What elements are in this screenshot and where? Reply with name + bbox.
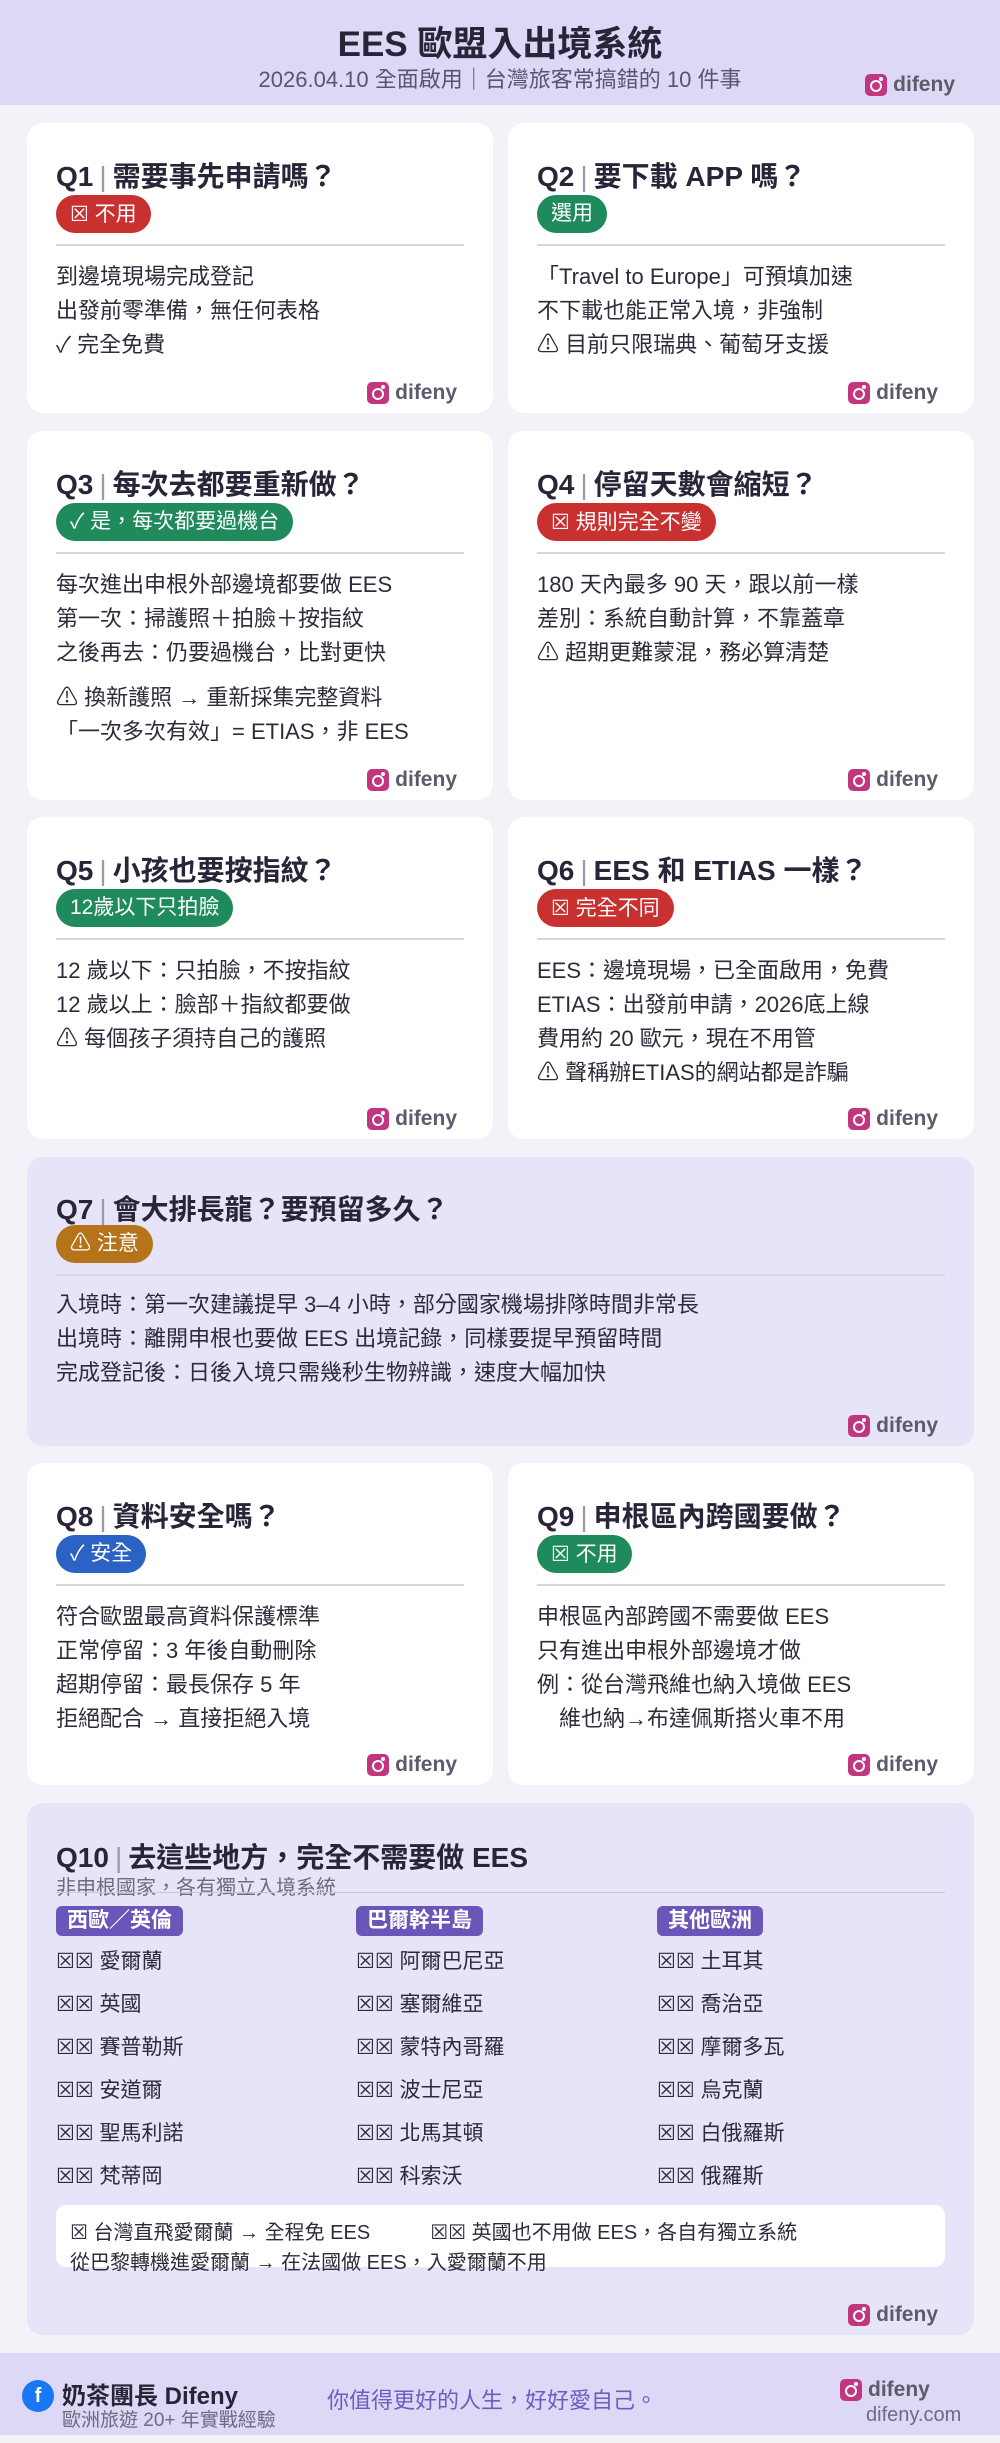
body text: 維也納→布達佩斯搭火車不用 [559,1706,845,1731]
body text: 符合歐盟最高資料保護標準 [56,1604,320,1629]
badge: ☒ 規則完全不變 [551,510,702,534]
panel: Q6 [508,817,974,1139]
logo [848,1107,938,1130]
body text: 申根區內部跨國不需要做 EES [537,1604,829,1629]
logo: difeny [876,768,938,791]
body text: 出發前零準備，無任何表格 [56,298,320,323]
list: balkan: ☒☒ 塞爾維亞 [356,1992,484,2016]
body text: 入境時：第一次建議提早 3–4 小時，部分國家機場排隊時間非常長 [56,1292,699,1317]
heading Q10: Q10|去這些地方，完全不需要做 EES [56,1842,528,1873]
logo [367,1107,457,1130]
tag: other: 其他歐洲 [668,1909,752,1932]
badge [56,889,233,927]
body text [56,958,351,1051]
logo: difeny [395,1107,457,1130]
body text: 「一次多次有效」= ETIAS，非 EES [56,719,409,744]
badge: ⚠ 注意 [70,1232,139,1255]
body text [56,1604,320,1731]
logo: difeny [876,381,938,404]
body text: ⚠ 超期更難蒙混，務必算清楚 [537,640,829,665]
logo: difeny [395,1753,457,1776]
logo [848,381,938,404]
logo: difeny [876,1414,938,1437]
heading Q6: Q6|EES 和 ETIAS 一樣？ [537,855,867,886]
note box: ☒ 台灣直飛愛爾蘭 → 全程免 EES ☒☒ 英國也不用做 EES，各自有獨立系統 [70,2220,797,2244]
body text: 完成登記後：日後入境只需幾秒生物辨識，速度大幅加快 [56,1360,606,1385]
note box: 從巴黎轉機進愛爾蘭 → 在法國做 EES，入愛爾蘭不用 [70,2252,547,2274]
list: balkan: ☒☒ 北馬其頓 [356,2121,484,2145]
list: west: ☒☒ 聖馬利諾 [56,2121,184,2145]
logo [367,768,457,791]
logo: difeny [876,2303,938,2326]
heading Q2: Q2|要下載 APP 嗎？ [537,161,806,192]
body text: 每次進出申根外部邊境都要做 EES [56,572,392,597]
icon: facebook [22,2380,54,2412]
list: other: ☒☒ 俄羅斯 [657,2164,764,2188]
heading Q1: Q1|需要事先申請嗎？ [56,161,337,192]
logo [848,1753,938,1776]
author: 歐洲旅遊 20+ 年實戰經驗 [62,2410,276,2431]
body text: 「Travel to Europe」可預填加速 [537,264,853,289]
panel: Q9 [508,1463,974,1785]
body text [537,1604,851,1731]
footer logo: difeny.com [866,2404,961,2426]
body text: ✓ 完全免費 [56,332,165,357]
body text [56,572,409,744]
body text: 差別：系統自動計算，不靠蓋章 [537,606,845,631]
subtitle: 非申根國家，各有獨立入境系統 [56,1877,336,1899]
panel: Q10 [27,1803,974,2335]
logo [367,381,457,404]
tag: other [657,1906,763,1936]
heading Q8: Q8|資料安全嗎？ [56,1501,281,1532]
slogan: 你值得更好的人生，好好愛自己。 [327,2388,657,2413]
body text [56,1292,699,1385]
list: other: ☒☒ 摩爾多瓦 [657,2035,784,2059]
body text: 正常停留：3 年後自動刪除 [56,1638,316,1663]
author: 奶茶團長 Difeny [62,2383,238,2410]
list: west [56,1949,184,2188]
panel: Q1 [27,123,493,413]
list: balkan: ☒☒ 科索沃 [356,2164,462,2188]
panel: Q4 [508,431,974,800]
panel: Q5 [27,817,493,1139]
list: other: ☒☒ 烏克蘭 [657,2078,764,2102]
note box [56,2205,945,2267]
heading Q3: Q3|每次去都要重新做？ [56,469,365,500]
heading Q5: Q5|小孩也要按指紋？ [56,855,337,886]
body text: 不下載也能正常入境，非強制 [537,298,823,323]
list: balkan: ☒☒ 波士尼亞 [356,2078,484,2102]
body text: 超期停留：最長保存 5 年 [56,1672,300,1697]
heading Q7: Q7|會大排長龍？要預留多久？ [56,1194,449,1225]
body text [537,958,889,1085]
list: other [657,1949,784,2188]
list: balkan: ☒☒ 阿爾巴尼亞 [356,1949,504,1973]
badge: ☒ 完全不同 [551,896,660,920]
logo: difeny [876,1107,938,1130]
logo: difeny [395,768,457,791]
badge: ☒ 不用 [551,1542,618,1566]
badge [56,1225,153,1263]
body text [537,572,859,665]
list: west: ☒☒ 賽普勒斯 [56,2035,184,2059]
body text: 只有進出申根外部邊境才做 [537,1638,801,1663]
list: balkan: ☒☒ 蒙特內哥羅 [356,2035,504,2059]
list: balkan [356,1949,504,2188]
body text: 拒絕配合 → 直接拒絕入境 [56,1706,310,1731]
badge: ✓ 是，每次都要過機台 [70,510,279,533]
list: other: ☒☒ 白俄羅斯 [657,2121,784,2145]
badge [537,1535,632,1573]
logo [367,1753,457,1776]
badge: ☒ 不用 [70,202,137,226]
list: west: ☒☒ 梵蒂岡 [56,2164,162,2188]
badge [537,195,607,233]
body text: ⚠ 目前只限瑞典、葡萄牙支援 [537,332,829,357]
body text [537,264,853,357]
logo [848,2303,938,2326]
footer logo: difeny [868,2378,930,2401]
icon: facebook: f [35,2385,41,2407]
panel: Q2 [508,123,974,413]
body text: 到邊境現場完成登記 [56,264,254,289]
badge: 12歲以下只拍臉 [70,896,219,919]
tag: west: 西歐／英倫 [67,1909,172,1932]
badge [537,889,674,927]
badge: ✓ 安全 [70,1542,132,1565]
body text: 12 歲以下：只拍臉，不按指紋 [56,958,351,983]
header logo [865,73,955,96]
header logo: difeny [893,73,955,96]
logo: difeny [395,381,457,404]
badge [56,503,293,541]
header [0,0,1000,105]
list: other: ☒☒ 喬治亞 [657,1992,764,2016]
badge: 選用 [551,202,593,225]
list: west: ☒☒ 愛爾蘭 [56,1949,162,1973]
logo [848,1414,938,1437]
panel: Q8 [27,1463,493,1785]
body text: 費用約 20 歐元，現在不用管 [537,1026,816,1051]
body text: 第一次：掃護照＋拍臉＋按指紋 [56,606,364,631]
author [62,2383,276,2431]
tag: balkan: 巴爾幹半島 [367,1909,472,1932]
badge [56,1535,146,1573]
title: EES 歐盟入出境系統 [338,25,662,64]
logo [848,768,938,791]
body text: ETIAS：出發前申請，2026底上線 [537,992,870,1017]
footer [0,2353,1000,2435]
panel: Q7 [27,1157,974,1446]
tag: west [56,1906,183,1936]
heading Q4: Q4|停留天數會縮短？ [537,469,818,500]
logo: difeny [876,1753,938,1776]
list: west: ☒☒ 安道爾 [56,2078,162,2102]
body text [56,264,320,357]
heading Q9: Q9|申根區內跨國要做？ [537,1501,846,1532]
badge [537,503,716,541]
panel: Q3 [27,431,493,800]
list: west: ☒☒ 英國 [56,1992,142,2016]
body text: 例：從台灣飛維也納入境做 EES [537,1672,851,1697]
body text: 出境時：離開申根也要做 EES 出境記錄，同樣要提早預留時間 [56,1326,662,1351]
body text: 180 天內最多 90 天，跟以前一樣 [537,572,859,597]
body text: ⚠ 聲稱辦ETIAS的網站都是詐騙 [537,1060,849,1085]
tag: balkan [356,1906,483,1936]
footer logo [840,2378,961,2426]
badge [56,195,151,233]
body text: 之後再去：仍要過機台，比對更快 ⚠ 換新護照 → 重新採集完整資料 [56,640,386,710]
body text: 12 歲以上：臉部＋指紋都要做 [56,992,351,1017]
list: other: ☒☒ 土耳其 [657,1949,764,1973]
subtitle: 2026.04.10 全面啟用｜台灣旅客常搞錯的 10 件事 [259,67,741,92]
body text: EES：邊境現場，已全面啟用，免費 [537,958,889,983]
body text: ⚠ 每個孩子須持自己的護照 [56,1026,326,1051]
